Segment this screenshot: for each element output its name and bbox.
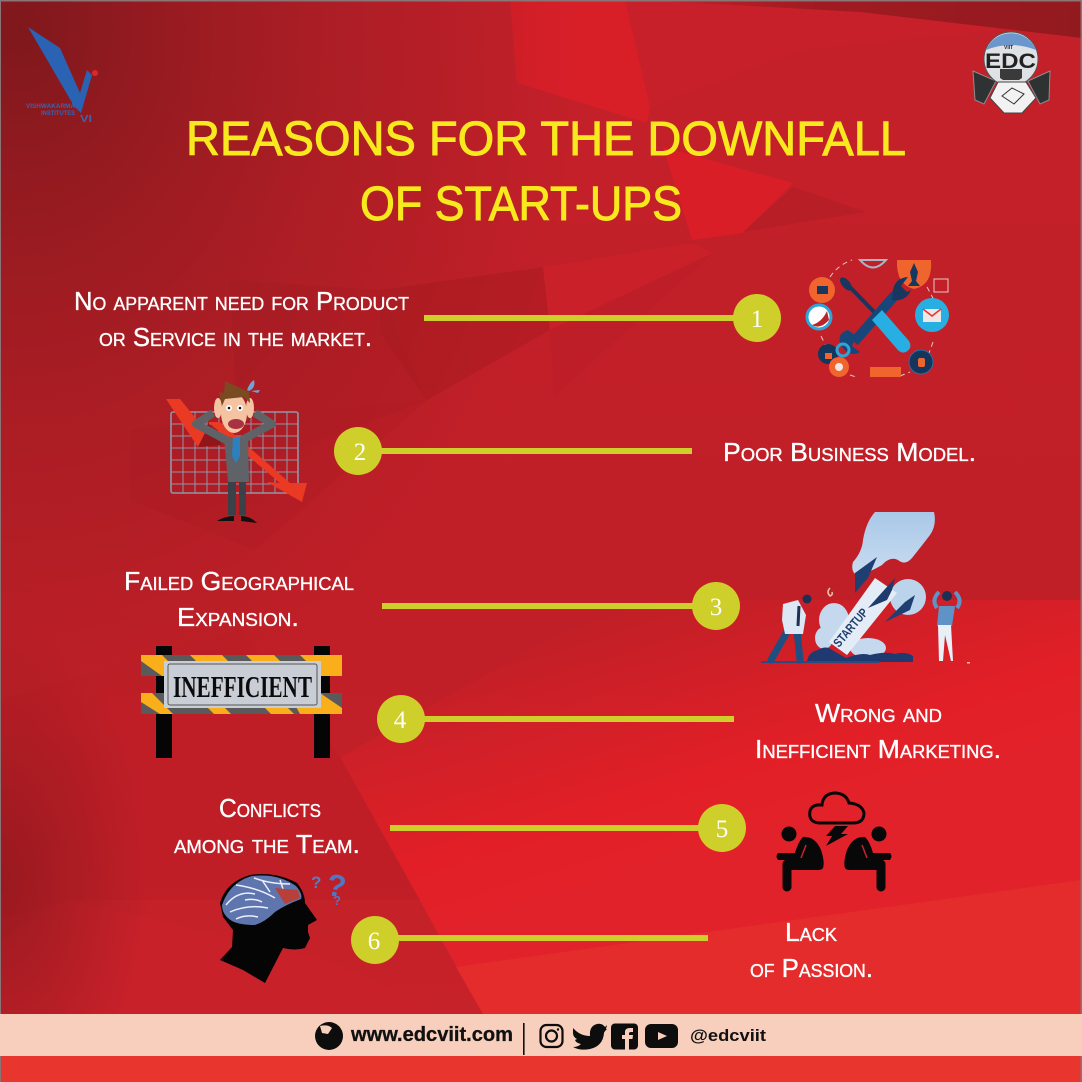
item 6 connector and number xyxy=(351,916,708,964)
item 2 connector and number xyxy=(334,427,692,475)
item 1 text xyxy=(74,286,409,352)
icon: crashed startup rocket: STARTUP xyxy=(831,606,871,650)
icon: youtube xyxy=(645,1024,678,1048)
logo: Vishwakarma Institutes: INSTITUTES xyxy=(41,111,75,117)
item 5 connector and number xyxy=(390,804,746,852)
title: REASONS FOR THE DOWNFALL xyxy=(186,113,906,166)
item 3 text: Expansion. xyxy=(177,602,299,632)
item 2 text: Poor Business Model. xyxy=(723,437,976,467)
item 4 text: Inefficient Marketing. xyxy=(755,734,1001,764)
item 1 connector and number xyxy=(424,294,781,342)
footer bar xyxy=(0,1014,1082,1056)
item 2 connector and number: 2 xyxy=(354,439,366,466)
item 5 text: Conflicts xyxy=(219,793,321,823)
item 3 connector and number: 3 xyxy=(710,594,722,621)
icon: worried businessman with falling chart xyxy=(166,380,307,523)
icon: inefficient barrier xyxy=(141,646,342,758)
item 6 text: Lack xyxy=(785,917,837,947)
handle: @edcviit xyxy=(690,1026,766,1045)
icon: crashed startup rocket xyxy=(761,512,970,664)
item 4 connector and number: 4 xyxy=(394,707,407,734)
icon: team conflict xyxy=(776,793,892,887)
icon: instagram xyxy=(540,1025,562,1047)
icon: head with brain: ? xyxy=(333,893,341,908)
logo: Vishwakarma Institutes xyxy=(26,27,98,125)
item 4 text xyxy=(755,698,1001,764)
item 1 text: or Service in the market. xyxy=(99,322,372,352)
item 6 text xyxy=(750,917,873,983)
logo: EDC: VIIT xyxy=(1004,45,1013,51)
logo: Vishwakarma Institutes: VI xyxy=(80,114,92,125)
item 5 connector and number: 5 xyxy=(716,816,728,843)
item 1 text: No apparent need for Product xyxy=(74,286,409,316)
icon: head with brain: ? xyxy=(324,867,349,905)
item 6 connector and number: 6 xyxy=(368,928,380,955)
logo: EDC xyxy=(973,32,1050,113)
item 6 text: of Passion. xyxy=(750,953,873,983)
icon: tools xyxy=(807,260,949,377)
title: OF START-UPS xyxy=(360,178,682,231)
logo: EDC: EDC xyxy=(985,50,1036,73)
icon: facebook xyxy=(611,1024,638,1050)
title xyxy=(186,113,906,231)
icon: head with brain xyxy=(220,867,349,983)
icon: globe xyxy=(315,1022,343,1050)
item 4 text: Wrong and xyxy=(815,698,942,728)
icon: twitter xyxy=(573,1024,607,1050)
item 3 text xyxy=(124,566,354,632)
item 3 connector and number xyxy=(382,582,740,630)
icon: head with brain: ? xyxy=(311,873,321,892)
item 4 connector and number xyxy=(377,695,734,743)
item 5 text: among the Team. xyxy=(174,829,360,859)
item 5 text xyxy=(174,793,360,859)
logo: Vishwakarma Institutes: VISHWAKARMA xyxy=(26,104,76,110)
item 1 connector and number: 1 xyxy=(751,306,763,333)
website: www.edcviit.com xyxy=(350,1024,513,1046)
item 3 text: Failed Geographical xyxy=(124,566,354,596)
icon: inefficient barrier: INEFFICIENT xyxy=(173,669,312,704)
